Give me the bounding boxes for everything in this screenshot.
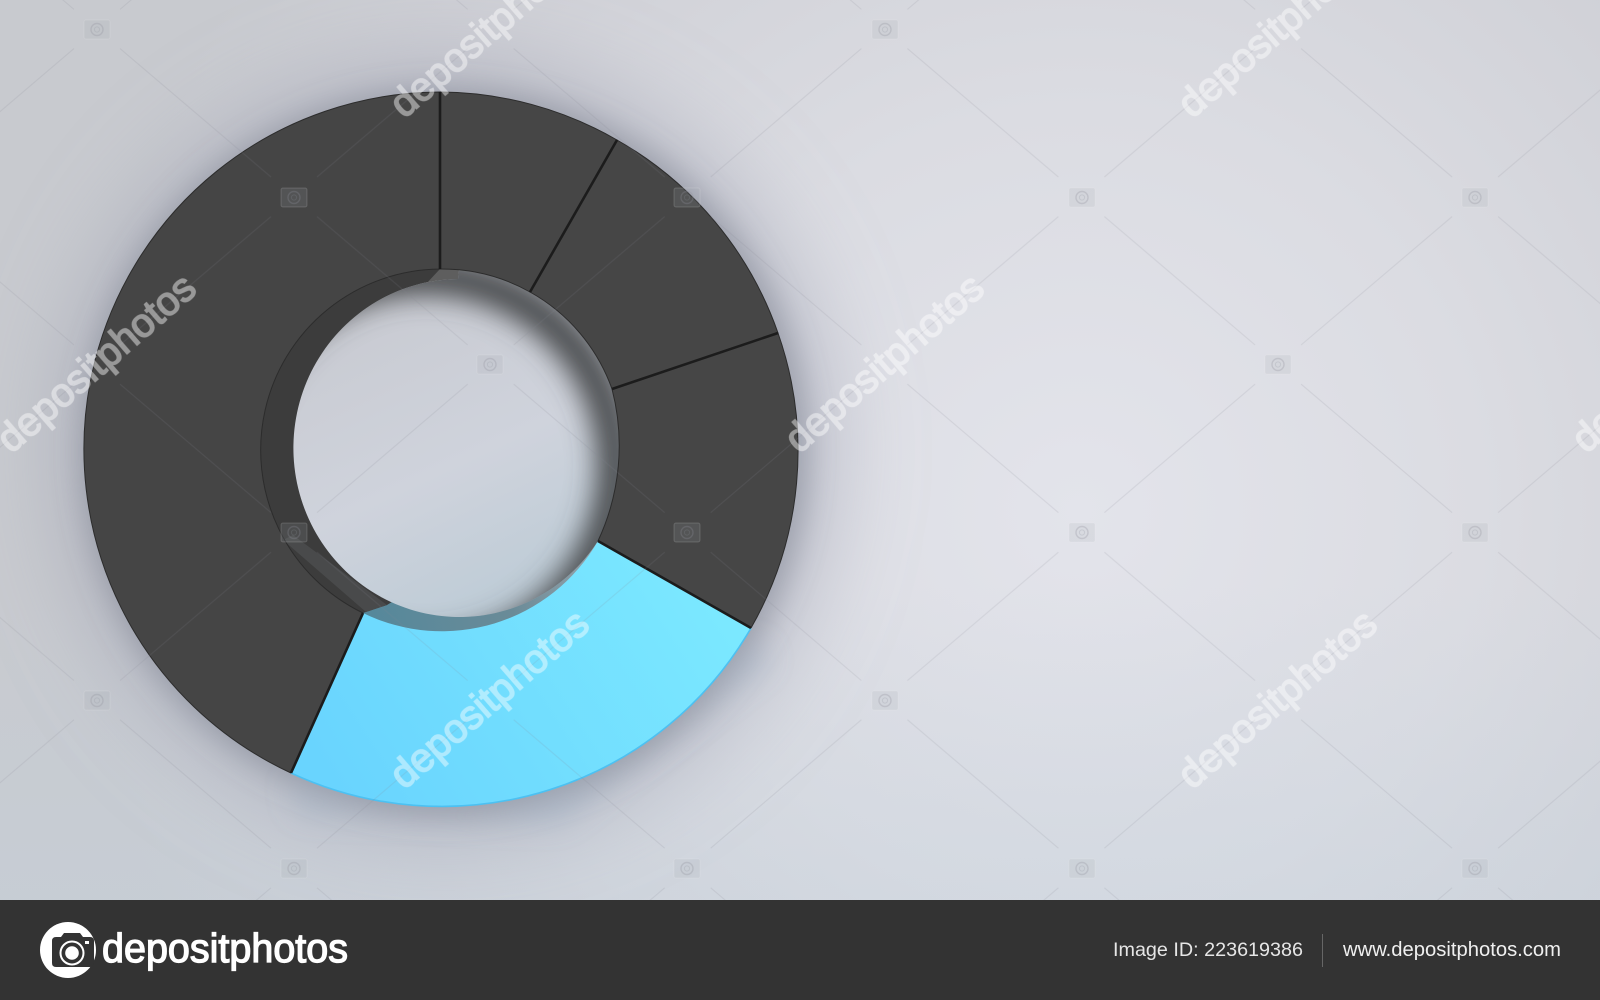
dark segment: right [598, 333, 798, 628]
watermark wordmarks: depositphotos [1169, 601, 1385, 797]
footer bar [0, 900, 1600, 1000]
centre hole [293, 270, 619, 617]
website url: www.depositphotos.com [1342, 939, 1561, 961]
segment separators [291, 92, 778, 773]
watermark wordmarks [0, 0, 1600, 797]
donut chart [84, 92, 798, 806]
image id: Image ID: 223619386 [1113, 939, 1303, 961]
icon: depositphotos camera logo [40, 922, 96, 978]
dark segment: large left slice [84, 92, 440, 773]
blue highlighted segment [291, 541, 751, 806]
watermark wordmarks: depositphotos [381, 601, 597, 797]
dark segment: upper right [530, 140, 778, 389]
blue segment outer rim [291, 628, 751, 806]
logo wordmark: depositphotos [102, 925, 348, 971]
dark segment: top [440, 92, 617, 292]
footer divider [1322, 934, 1323, 967]
watermark wordmarks: depositphotos [776, 265, 992, 461]
inner wall of the ring [254, 262, 626, 640]
watermark camera icons [84, 20, 1488, 878]
